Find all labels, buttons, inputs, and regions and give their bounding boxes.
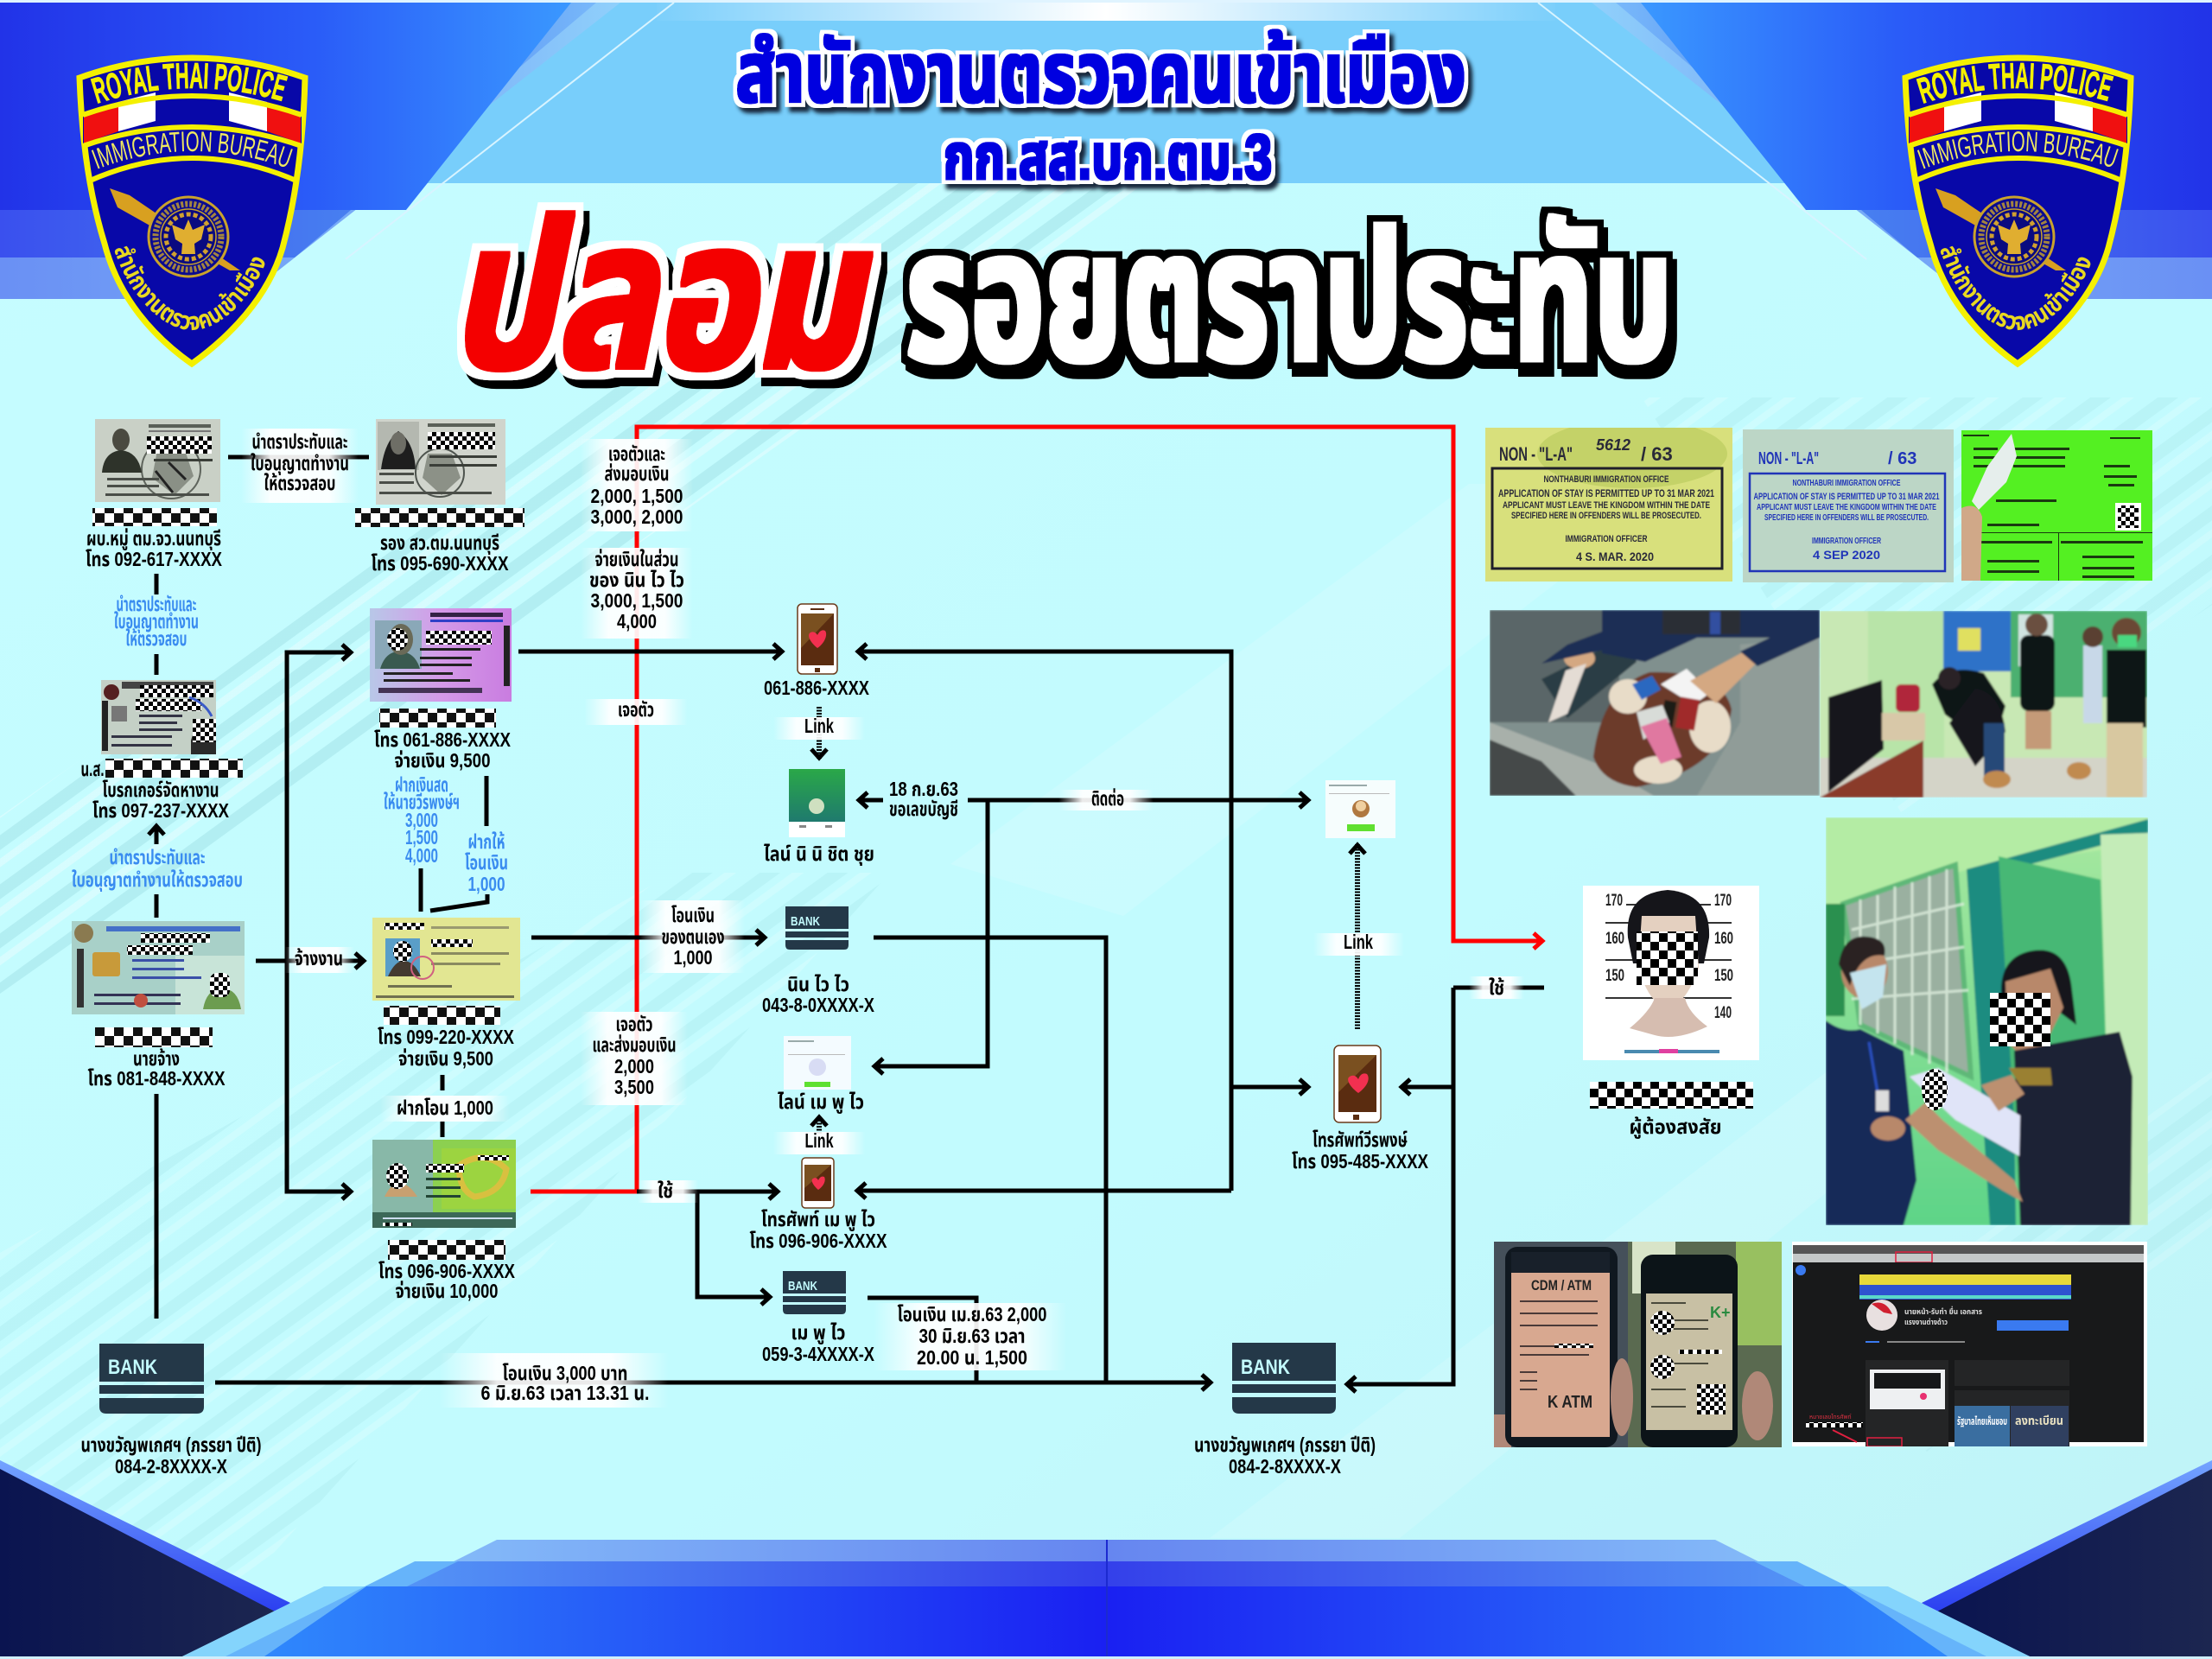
flow text labels: โอนเงิน 3,000 บาท xyxy=(503,1362,627,1384)
badge: left Royal Thai Police Immigration Bureau: ROYAL THAI POLICE xyxy=(90,62,289,104)
employer name and phone: นายจ้าง xyxy=(133,1047,180,1070)
photo: blue-ink visa stamp xyxy=(1743,429,1954,582)
employer name and phone xyxy=(88,1047,226,1090)
bank Nin Wai Wai label xyxy=(762,973,875,1016)
photo: blue-ink visa stamp: NON - "L-A" xyxy=(1758,449,1819,468)
photo: suspect mugshot: 140 xyxy=(1714,1004,1732,1022)
broker name and phone: โทร 097-237-XXXX xyxy=(92,799,230,822)
flow text labels: โอนเงิน xyxy=(465,851,508,874)
subtitle: division: กก.สส.บก.ตม.3 xyxy=(944,121,1272,193)
holder phone and payment xyxy=(378,1026,515,1070)
headline: stamp marks: รอยตราประทับ xyxy=(906,194,1673,399)
photo: Facebook page screenshot: หมายเลขโทรศัพท์ xyxy=(1809,1414,1852,1421)
photo: Facebook page screenshot xyxy=(1792,1242,2147,1446)
holder phone and payment: โทร 096-906-XXXX xyxy=(378,1260,516,1282)
flow text labels xyxy=(72,430,1504,1404)
photo: neon green work sticker xyxy=(1961,430,2152,581)
face censor xyxy=(1637,931,1698,985)
phone Weerapong label: โทร 095-485-XXXX xyxy=(1292,1150,1429,1173)
holder phone and payment xyxy=(378,1260,516,1302)
flow text labels: นำตราประทับและ xyxy=(252,430,347,453)
censor band xyxy=(105,759,243,778)
photo: suspect mugshot: 160 xyxy=(1714,930,1733,948)
flow text labels: ของ นิน ไว ไว xyxy=(589,569,684,591)
officer name and phone xyxy=(86,527,223,570)
flow text labels: จ่ายเงินในส่วน xyxy=(594,548,679,570)
flow text labels: 6 มิ.ย.63 เวลา 13.31 น. xyxy=(480,1382,650,1404)
broker name and phone: น.ส. xyxy=(81,758,104,780)
bottom decorative bands xyxy=(0,1460,2212,1659)
holder phone and payment: จ่ายเงิน 9,500 xyxy=(394,749,491,772)
photo: Facebook page screenshot: รัฐบาลไทยเห็นชอบ xyxy=(1957,1415,2007,1427)
officer name and phone: ผบ.หมู่ ตม.จว.นนทบุรี xyxy=(86,527,221,550)
flow text labels: Link xyxy=(805,1129,834,1152)
bank Me Phu Wai label: เม พู ไว xyxy=(791,1321,845,1344)
bank Me Phu Wai label xyxy=(762,1321,875,1365)
photo: ATM slip and bank transfer on phones: K ATM xyxy=(1548,1393,1592,1412)
flow text labels: 3,000, 2,000 xyxy=(591,505,683,528)
badge: left Royal Thai Police Immigration Bureau xyxy=(76,55,308,368)
bank right label: นางขวัญพเกศฯ (ภรรยา ปีติ) xyxy=(1194,1433,1376,1456)
photo: suspect mugshot: 150 xyxy=(1714,967,1733,985)
flow text labels: 3,000, 1,500 xyxy=(591,589,683,612)
photo: Facebook page screenshot: ลงทะเบียน xyxy=(2015,1414,2063,1427)
flow text labels: ให้ตรวจสอบ xyxy=(126,627,187,650)
flow text labels: ให้นายวีรพงษ์ฯ xyxy=(384,791,460,813)
photo: search of room xyxy=(1820,611,2147,798)
employer name and phone: โทร 081-848-XXXX xyxy=(88,1067,226,1090)
phone Weerapong label xyxy=(1292,1128,1429,1173)
censor band xyxy=(379,709,496,728)
flow text labels: จ้างงาน xyxy=(295,947,343,969)
card: yellow work permit xyxy=(372,918,520,1070)
holder phone and payment: โทร 099-220-XXXX xyxy=(378,1026,515,1048)
photo: yellow visa stamp xyxy=(1485,428,1732,582)
photo: Facebook page screenshot: นายหน้า-รับทำ ยื่น เอกสาร xyxy=(1904,1306,1982,1316)
screenshot: LINE profile Ni Ni Chit Chui xyxy=(789,769,845,837)
deputy name and phone: โทร 095-690-XXXX xyxy=(372,552,509,575)
flow text labels: ฝากโอน 1,000 xyxy=(397,1096,493,1119)
photo: yellow visa stamp: / 63 xyxy=(1641,443,1673,465)
icon: bank left: BANK xyxy=(108,1356,158,1379)
bank Nin Wai Wai label: นิน ไว ไว xyxy=(787,973,849,995)
photo: yellow visa stamp: 5612 xyxy=(1596,436,1630,454)
bank left label xyxy=(81,1433,261,1478)
censor band xyxy=(355,508,524,527)
photo: officer questioning suspect at door xyxy=(1826,817,2148,1225)
icon: bank left xyxy=(99,1344,204,1414)
screenshot: LINE profile Weerapong xyxy=(1325,780,1395,838)
photo: ATM slip and bank transfer on phones xyxy=(1494,1242,1782,1447)
phone Me Phu Wai label: โทร 096-906-XXXX xyxy=(750,1230,887,1252)
photo: ATM slip and bank transfer on phones: CDM / ATM xyxy=(1531,1277,1592,1294)
photo: suspect mugshot: 160 xyxy=(1605,930,1624,948)
suspect label: ผู้ต้องสงสัย xyxy=(1630,1116,1721,1139)
flow text labels: Link xyxy=(1344,931,1373,953)
flow text labels: 2,000 xyxy=(614,1055,654,1077)
phone Me Phu Wai label: โทรศัพท์ เม พู ไว xyxy=(761,1208,875,1231)
bank left label: นางขวัญพเกศฯ (ภรรยา ปีติ) xyxy=(81,1433,261,1456)
photo: blue-ink visa stamp: NONTHABURI IMMIGRATION OFFICE xyxy=(1792,479,1901,488)
flow text labels: ให้ตรวจสอบ xyxy=(264,472,335,494)
badge: right Royal Thai Police Immigration Bureau: ROYAL THAI POLICE xyxy=(1916,62,2113,104)
flow lines and arrows xyxy=(156,427,1544,1384)
flow text labels: นำตราประทับและ xyxy=(116,593,197,615)
photo: suspect mugshot: 170 xyxy=(1605,892,1623,910)
flow text labels: เจอตัว xyxy=(615,1013,653,1035)
flow text labels: ใช้ xyxy=(1489,976,1504,999)
flow text labels: ใบอนุญาตทำงาน xyxy=(114,610,199,633)
flow text labels: ฝากเงินสด xyxy=(395,773,448,796)
holder phone and payment: โทร 061-886-XXXX xyxy=(374,728,512,751)
icon: phone 061-886-XXXX xyxy=(798,604,837,674)
flow text labels: 18 ก.ย.63 xyxy=(889,778,958,800)
flow text labels: เจอตัว xyxy=(618,698,654,721)
icon: bank account Me Phu Wai xyxy=(783,1271,846,1314)
flow text labels: 4,000 xyxy=(405,844,438,867)
flow text labels: โอนเงิน xyxy=(671,904,715,926)
photo: Facebook page screenshot: แรงงานต่างด้าว xyxy=(1904,1317,1948,1326)
card: deputy inspector ID xyxy=(355,419,524,575)
holder phone and payment: จ่ายเงิน 9,500 xyxy=(398,1047,493,1070)
bank Me Phu Wai label: 059-3-4XXXX-X xyxy=(762,1343,875,1365)
flow text labels: 3,500 xyxy=(614,1076,654,1098)
flow text labels: 1,000 xyxy=(468,873,505,895)
officer name and phone: โทร 092-617-XXXX xyxy=(86,548,223,570)
icon: phone Weerapong xyxy=(1334,1046,1381,1122)
flow text labels: เจอตัวและ xyxy=(608,442,665,465)
flow text labels: ใช้ xyxy=(658,1179,673,1202)
flow text labels: และส่งมอบเงิน xyxy=(593,1033,676,1056)
flow text labels: ใบอนุญาตทำงาน xyxy=(251,452,349,475)
badge: left Royal Thai Police Immigration Bureau: สำนักงานตรวจคนเข้าเมือง xyxy=(114,245,264,330)
flow text labels: ใบอนุญาตทำงานให้ตรวจสอบ xyxy=(72,868,243,892)
icon: bank account Nin Wai Wai: BANK xyxy=(791,914,820,929)
badge: right Royal Thai Police Immigration Bureau xyxy=(1902,55,2134,368)
card: police officer ID xyxy=(86,419,223,570)
censor band xyxy=(388,1240,505,1260)
LINE Ni Ni label: ไลน์ นิ นิ ชิต ชุย xyxy=(764,842,874,866)
censor: suspect face xyxy=(1990,993,2050,1046)
flow text labels: นำตราประทับและ xyxy=(109,846,206,868)
censor: document photo xyxy=(1922,1069,1948,1110)
deputy name and phone xyxy=(372,531,509,575)
photo: ATM slip and bank transfer on phones: K+ xyxy=(1710,1304,1731,1321)
photo: suspect mugshot xyxy=(1583,886,1759,1060)
photo: yellow visa stamp: NONTHABURI IMMIGRATION OFFICE xyxy=(1543,474,1669,485)
badge: right Royal Thai Police Immigration Bureau: IMMIGRATION BUREAU xyxy=(1916,131,2119,169)
flow text labels: 3,000 xyxy=(405,809,438,831)
photo: blue-ink visa stamp: 4 SEP 2020 xyxy=(1813,548,1880,562)
icon: bank right: BANK xyxy=(1241,1356,1291,1379)
bank Nin Wai Wai label: 043-8-0XXXX-X xyxy=(762,994,875,1016)
flow text labels: ติดต่อ xyxy=(1091,787,1124,810)
flow text labels: โอนเงิน เม.ย.63 2,000 xyxy=(897,1303,1047,1325)
card: broker ID xyxy=(81,680,243,822)
phone Me Phu Wai label xyxy=(750,1208,887,1252)
flow text labels: ขอเลขบัญชี xyxy=(889,798,958,820)
badge: right Royal Thai Police Immigration Bureau: สำนักงานตรวจคนเข้าเมือง xyxy=(1941,245,2091,330)
flow text labels: 20.00 น. 1,500 xyxy=(917,1346,1027,1369)
censor band xyxy=(384,1006,500,1025)
censor band xyxy=(92,508,217,526)
photo: yellow visa stamp: NON - "L-A" xyxy=(1499,443,1573,465)
label glows over lines xyxy=(241,429,1524,1408)
phone Weerapong label: โทรศัพท์วีรพงษ์ xyxy=(1313,1128,1408,1151)
flow text labels: ของตนเอง xyxy=(662,925,724,948)
card: green passport page xyxy=(372,1140,516,1302)
photo: blue-ink visa stamp: / 63 xyxy=(1888,449,1916,468)
LINE Me Phu Wai label: ไลน์ เม พู ไว xyxy=(778,1090,864,1114)
icon: bank account Nin Wai Wai xyxy=(785,906,849,950)
photo: blue-ink visa stamp: IMMIGRATION OFFICER xyxy=(1812,537,1882,546)
badge: left Royal Thai Police Immigration Bureau: IMMIGRATION BUREAU xyxy=(92,131,293,169)
headline: fake: ปลอม xyxy=(448,180,872,411)
flow text labels: 2,000, 1,500 xyxy=(591,485,683,507)
broker name and phone: โบรกเกอร์จัดหางาน xyxy=(102,779,219,801)
photo: search of car seat xyxy=(1490,610,1820,796)
photo: suspect mugshot: 150 xyxy=(1605,967,1624,985)
broker name and phone xyxy=(81,758,230,822)
flow text labels: 1,000 xyxy=(674,946,712,969)
screenshot: LINE profile Me Phu Wai xyxy=(784,1036,851,1090)
holder phone and payment: จ่ายเงิน 10,000 xyxy=(396,1280,498,1302)
icon: phone Me Phu Wai xyxy=(802,1158,834,1208)
flow text labels: ฝากให้ xyxy=(468,830,505,853)
bank right label: 084-2-8XXXX-X xyxy=(1229,1455,1342,1478)
icon: bank account Me Phu Wai: BANK xyxy=(788,1279,817,1294)
title: office name: สำนักงานตรวจคนเข้าเมือง xyxy=(736,25,1465,120)
icon: bank right xyxy=(1232,1343,1336,1414)
flow text labels: 1,500 xyxy=(405,826,438,849)
censor band xyxy=(95,1027,213,1047)
card: purple non-Thai ID xyxy=(370,608,512,772)
flow text labels: ส่งมอบเงิน xyxy=(605,462,669,485)
censor band: suspect name xyxy=(1590,1082,1753,1109)
flow text labels: Link xyxy=(804,715,834,737)
photo: yellow visa stamp: 4 S. MAR. 2020 xyxy=(1576,550,1654,563)
phone 061-886-XXXX label: 061-886-XXXX xyxy=(764,677,870,699)
holder phone and payment xyxy=(374,728,512,772)
bank right label xyxy=(1194,1433,1376,1478)
flow text labels: 30 มิ.ย.63 เวลา xyxy=(919,1325,1025,1347)
bank left label: 084-2-8XXXX-X xyxy=(115,1455,228,1478)
photo: suspect mugshot: 170 xyxy=(1714,892,1732,910)
flow text labels: 4,000 xyxy=(617,610,657,632)
photo: yellow visa stamp: IMMIGRATION OFFICER xyxy=(1566,534,1648,544)
card: employer national ID xyxy=(72,921,245,1090)
deputy name and phone: รอง สว.ตม.นนทบุรี xyxy=(380,531,499,555)
